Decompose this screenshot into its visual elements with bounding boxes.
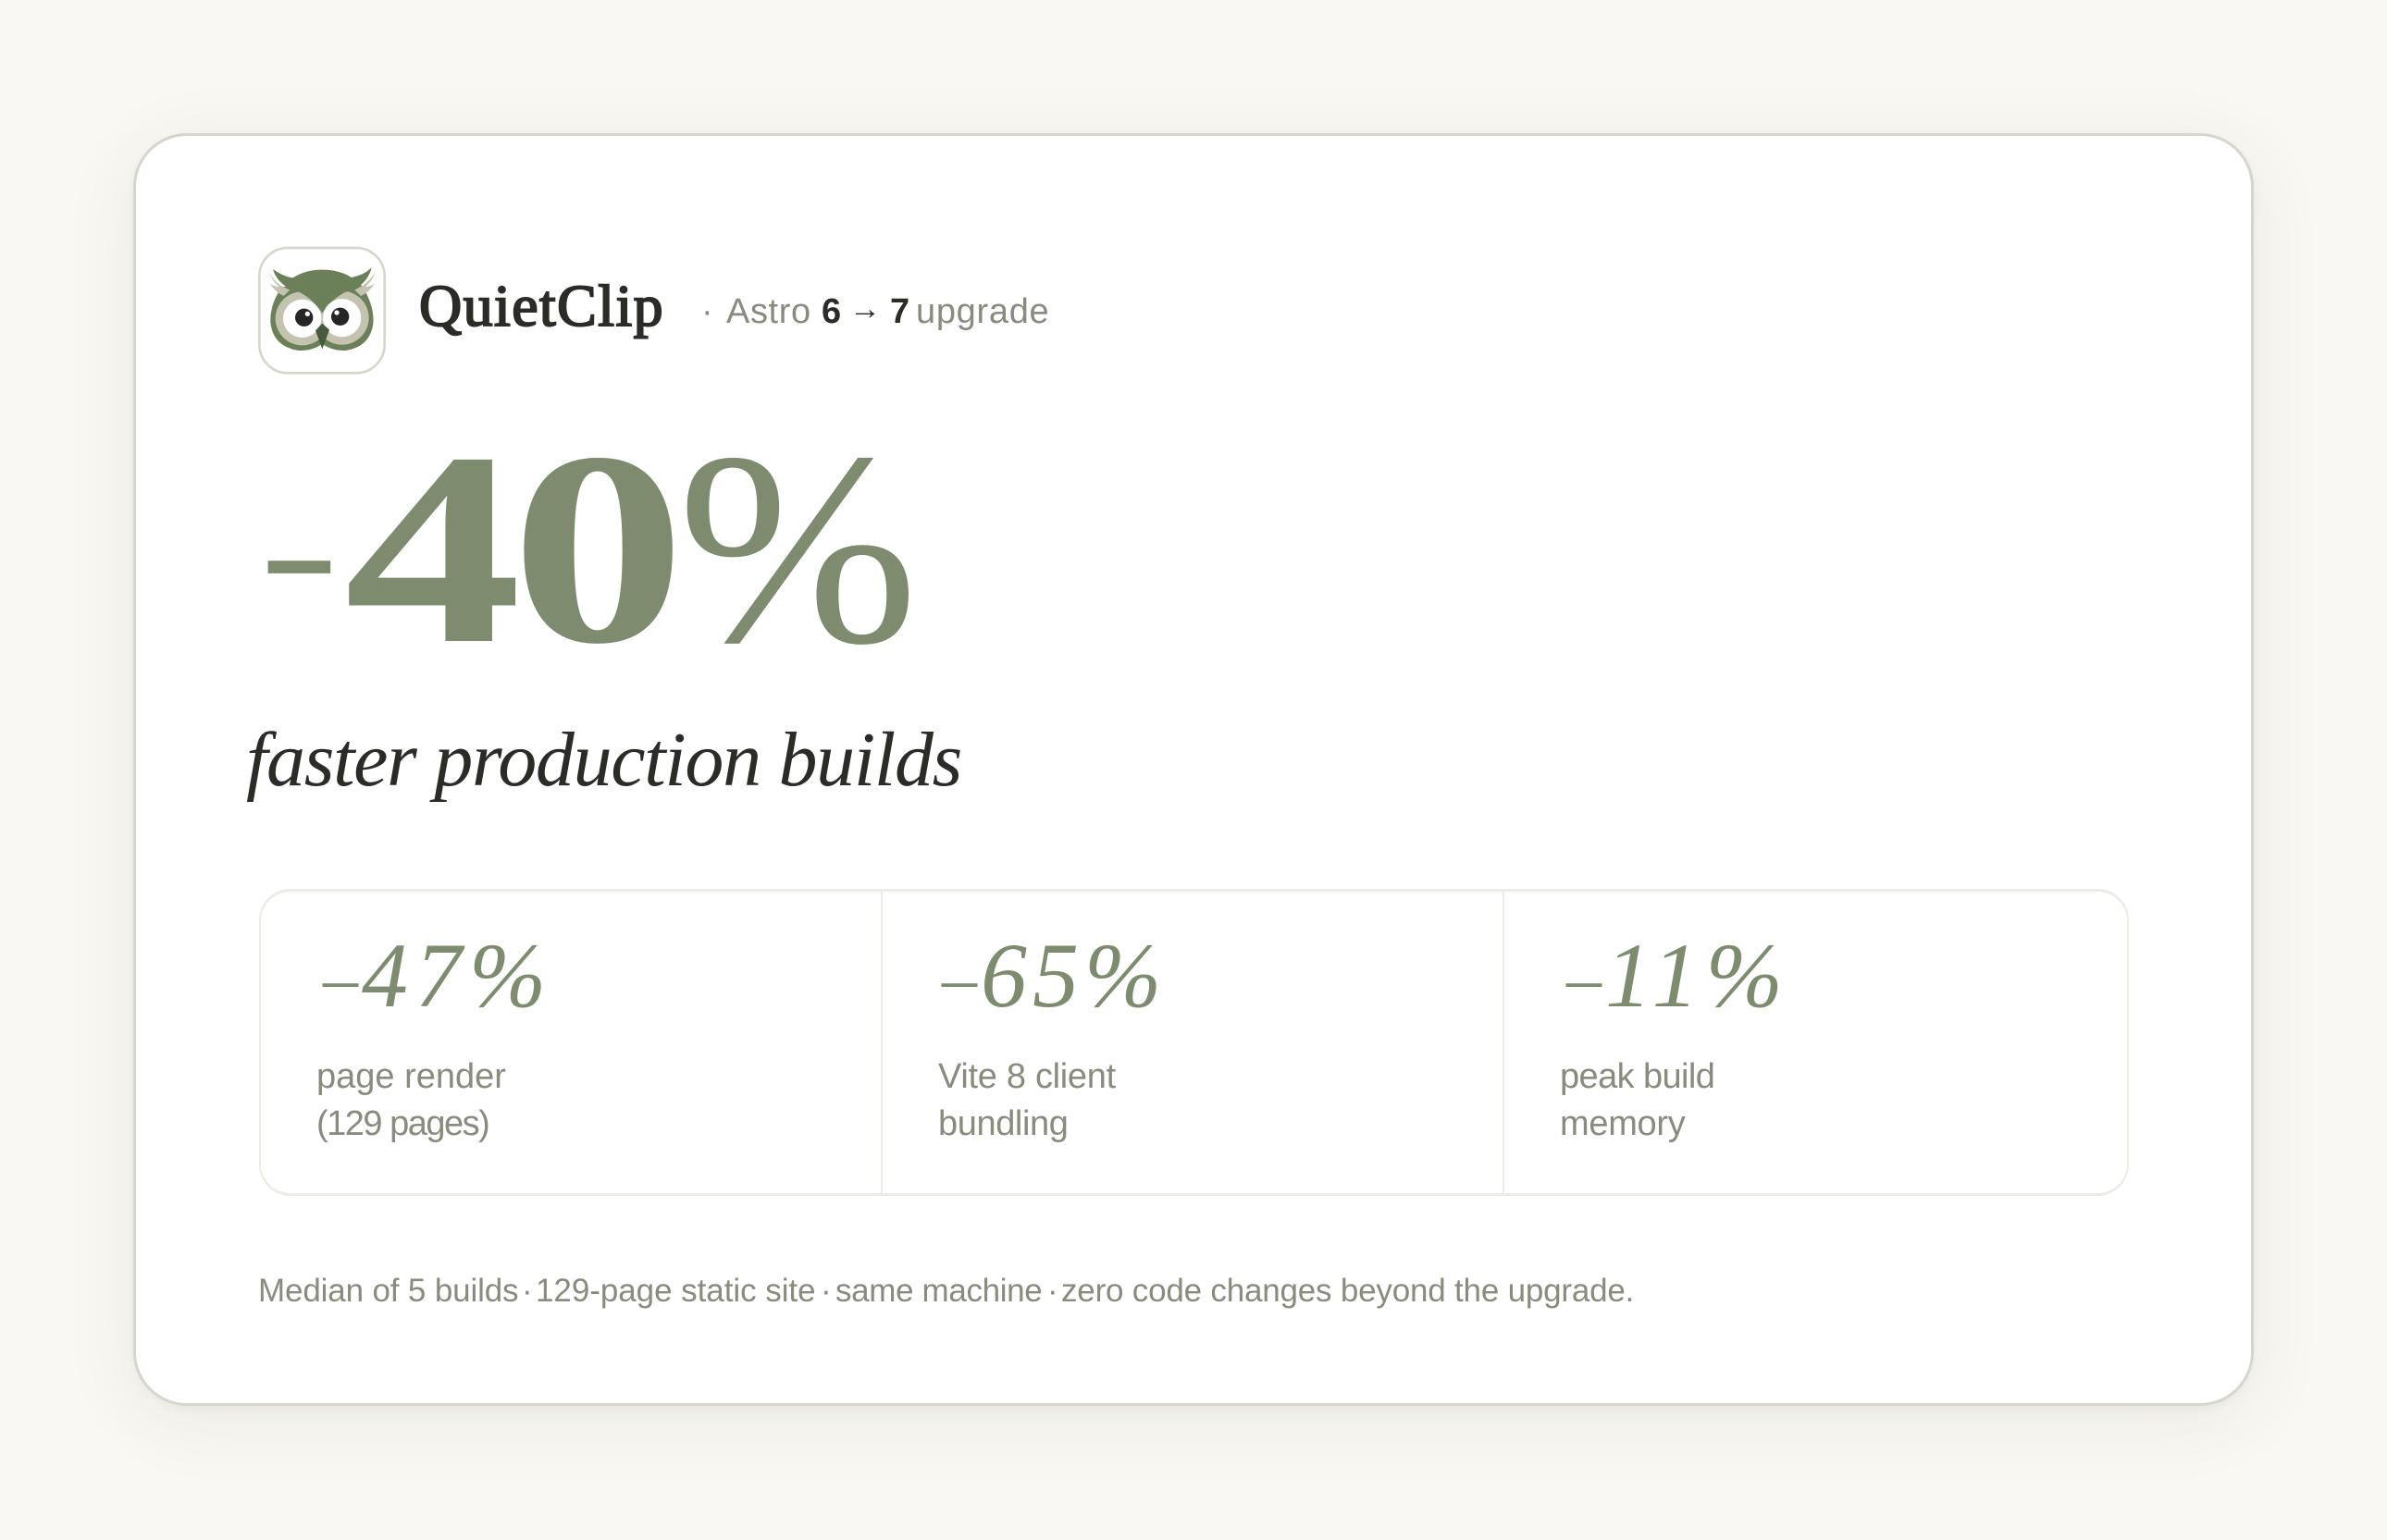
stat label (938, 1057, 1116, 1143)
stat label: peak build (1560, 1057, 1714, 1096)
footnote: Median of 5 builds (258, 1273, 518, 1309)
headline metric: % (677, 396, 919, 701)
headline metric (259, 396, 919, 701)
subtitle: upgrade label: → (849, 291, 881, 326)
stat label: bundling (938, 1104, 1068, 1143)
brand name: QuietClip (419, 273, 664, 339)
stat label: memory (1560, 1104, 1685, 1143)
footnote: 129-page static site (536, 1273, 816, 1309)
stat value: –11% (1566, 924, 1790, 1027)
stat label: Vite 8 client (938, 1057, 1116, 1096)
stat value: –47% (323, 924, 553, 1027)
stat: Vite 8 client bundling (883, 892, 1504, 1193)
stat label: page render (316, 1057, 506, 1096)
footnote: · (821, 1273, 832, 1309)
stat label: (129 pages) (316, 1104, 489, 1143)
stat label (316, 1057, 506, 1143)
stat: page render (261, 892, 883, 1193)
subtitle: upgrade label: upgrade (916, 292, 1049, 331)
headline metric: 0 (511, 396, 686, 701)
subtitle: upgrade label: 7 (890, 292, 909, 331)
icon: owl app logo (258, 246, 386, 375)
headline metric: 4 (344, 396, 522, 701)
panel: main card (133, 133, 2254, 1406)
stat label (1560, 1057, 1714, 1143)
headline metric: - (259, 457, 340, 644)
subtitle: upgrade label: Astro (726, 292, 811, 331)
headline caption: faster production builds (246, 717, 961, 803)
subtitle: upgrade label (701, 291, 1049, 331)
footnote: same machine (835, 1273, 1042, 1309)
footnote: · (1047, 1273, 1058, 1309)
stat value: –65% (942, 924, 1167, 1027)
subtitle: upgrade label: 6 (822, 292, 841, 331)
panel: stats row (259, 889, 2129, 1196)
footnote: · (522, 1273, 533, 1309)
footnote: zero code changes beyond the upgrade. (1061, 1273, 1634, 1309)
subtitle: upgrade label: · (701, 292, 713, 331)
stat: peak build memory (1560, 924, 1790, 1143)
footnote (258, 1273, 1634, 1309)
